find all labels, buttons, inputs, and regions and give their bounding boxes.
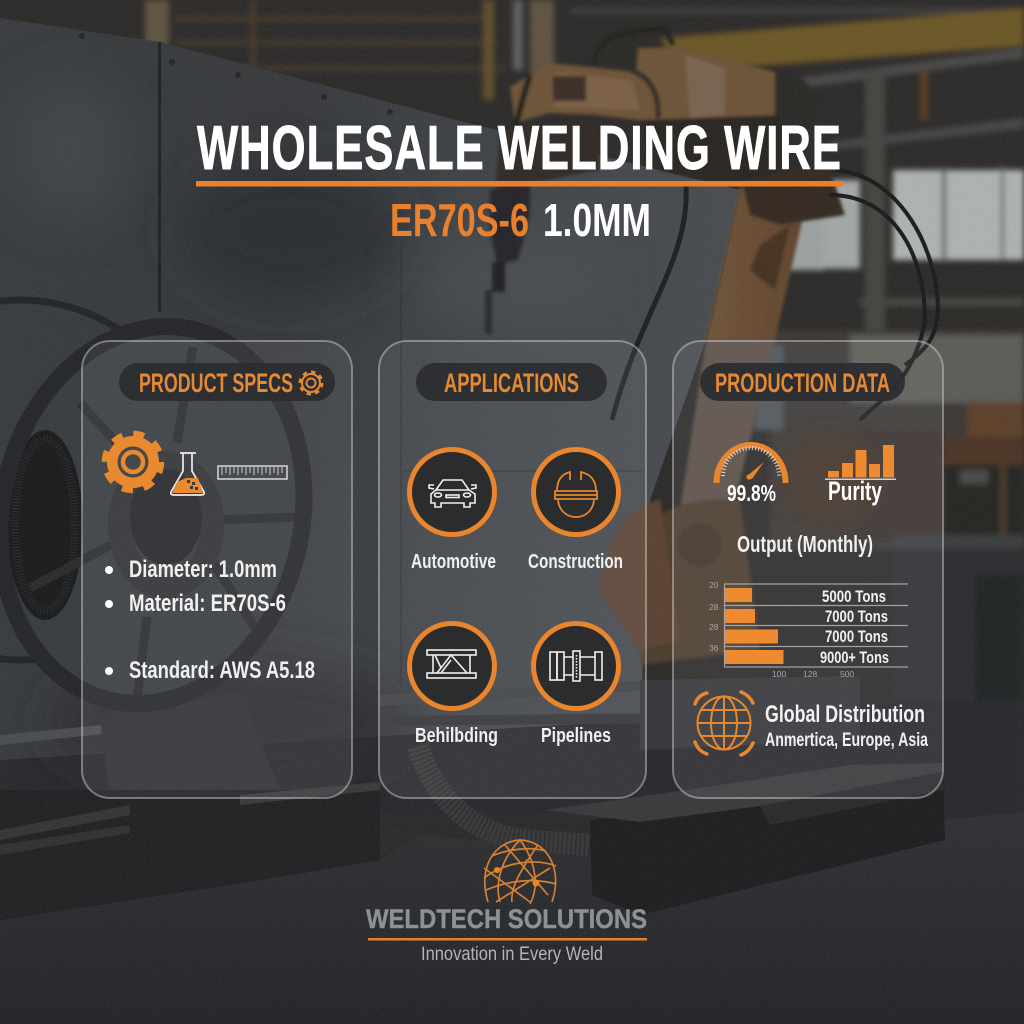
chart: monthly output: 20	[709, 580, 719, 590]
logo: company name: WELDTECH SOLUTIONS	[366, 904, 647, 934]
gauge: purity 99.8%	[716, 445, 786, 506]
chart: purity bars	[825, 445, 896, 506]
panel: applications	[379, 341, 646, 798]
subtitle: ER70S-6	[390, 194, 529, 246]
gauge: purity 99.8%: 99.8%	[727, 480, 776, 506]
chart: monthly output: 28	[709, 602, 719, 612]
robot arm	[485, 29, 845, 665]
panel: product specs	[82, 341, 352, 798]
icon: car	[410, 450, 494, 534]
wall panels	[0, 18, 740, 760]
label: construction: Construction	[528, 551, 623, 573]
label: building: Behilbding	[415, 725, 498, 747]
chart: purity bars: Purity	[828, 476, 882, 506]
icon: ruler	[218, 466, 287, 479]
chart: monthly output: 500	[840, 669, 854, 679]
platform	[590, 770, 945, 915]
lower debris	[0, 716, 196, 745]
tagline: Innovation in Every Weld	[421, 944, 603, 965]
icon: large gear	[105, 434, 161, 490]
specs list: Material: ER70S-6	[129, 590, 286, 617]
chart: monthly output: 9000+ Tons	[820, 648, 889, 667]
label: pipelines: Pipelines	[541, 725, 611, 747]
floor	[0, 812, 1024, 1024]
icon: hard hat	[534, 450, 618, 534]
specs list	[105, 556, 315, 684]
text: global distribution: Global Distribution	[765, 701, 925, 728]
specs list: Diameter: 1.0mm	[129, 556, 277, 583]
chart: monthly output: 128	[803, 669, 817, 679]
icon: pipeline	[534, 624, 618, 708]
hose	[418, 745, 590, 845]
chart: monthly output: 28	[709, 622, 719, 632]
chart: monthly output: 5000 Tons	[822, 587, 886, 606]
specs list: Standard: AWS A5.18	[129, 657, 315, 684]
panel: production data	[673, 341, 943, 798]
heading: output monthly: Output (Monthly)	[737, 531, 873, 557]
icon: flask	[171, 453, 204, 495]
heading: product specs: PRODUCT SPECS	[139, 368, 293, 398]
chart: monthly output: 100	[772, 669, 786, 679]
text: global distribution	[765, 701, 928, 751]
logo: globe	[484, 840, 556, 904]
cables	[612, 185, 686, 420]
chart: monthly output: 7000 Tons	[825, 627, 888, 646]
subtitle: 1.0MM	[543, 194, 651, 246]
label: automotive: Automotive	[411, 551, 496, 573]
heading: production data: PRODUCTION DATA	[715, 368, 890, 398]
chart: monthly output: 7000 Tons	[825, 607, 888, 626]
text: global distribution: Anmertica, Europe, Asia	[765, 730, 928, 751]
spool of wire	[0, 298, 338, 732]
chart: monthly output: 36	[709, 643, 719, 653]
heading: applications	[416, 363, 607, 401]
heading: applications: APPLICATIONS	[444, 368, 579, 398]
heading: product specs	[119, 363, 335, 401]
second wheel	[0, 300, 200, 660]
chart: monthly output	[709, 580, 908, 679]
icon: steel beam	[410, 624, 494, 708]
icon: global distribution	[695, 692, 753, 755]
heading: production data	[700, 363, 905, 401]
